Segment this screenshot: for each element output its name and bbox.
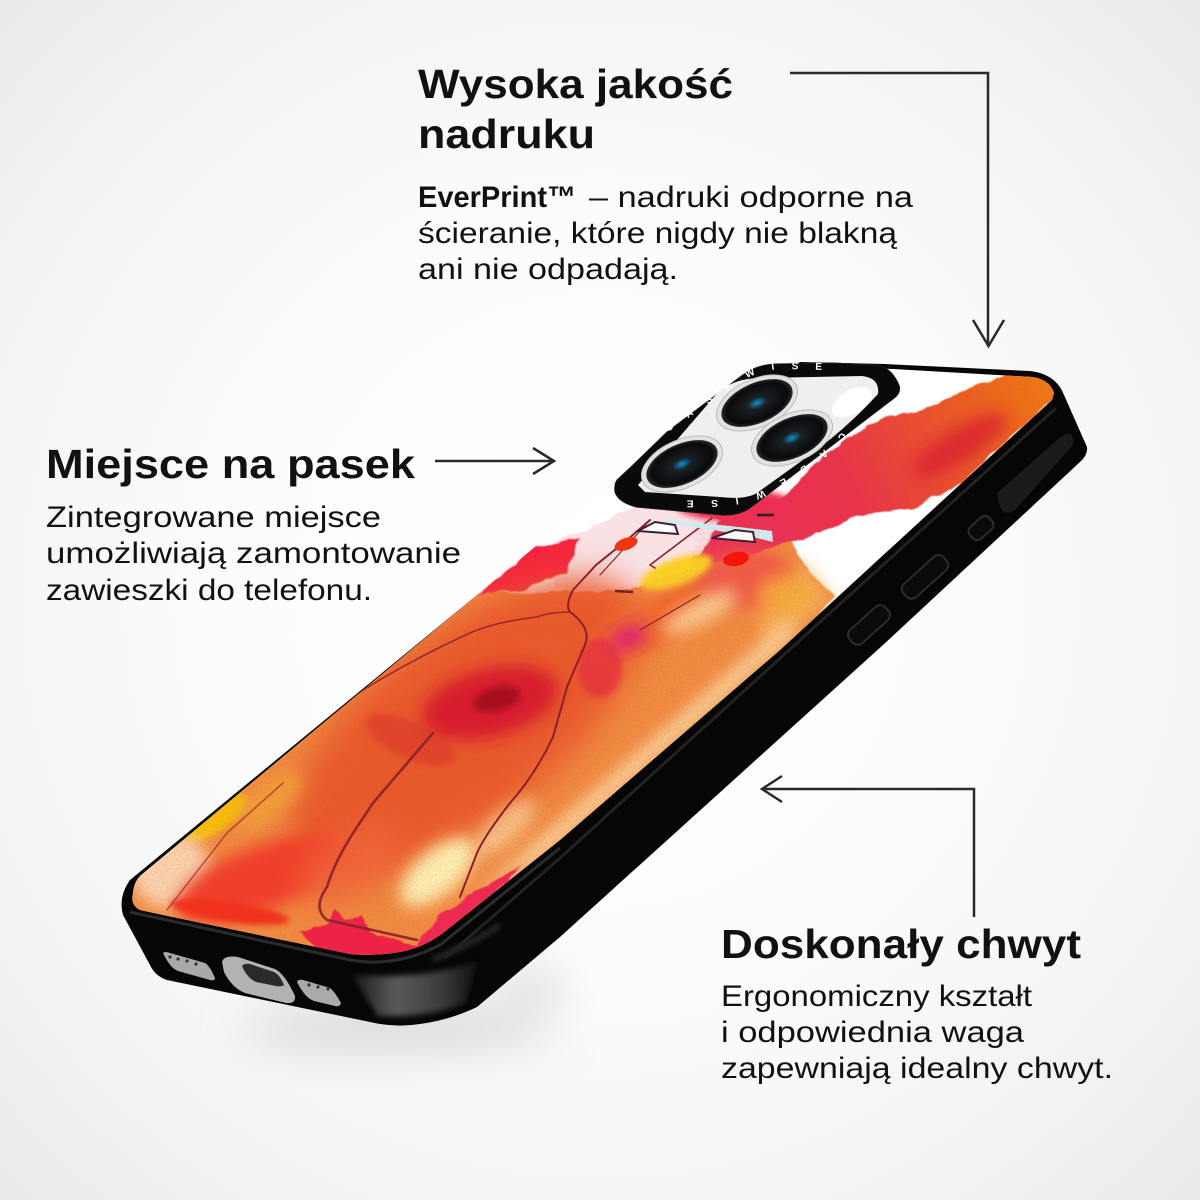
heading: print quality: nadruku [418,111,595,157]
text: perfect grip description: zapewniają idealny chwyt. [721,1052,1113,1085]
bump engraved brand text [668,362,846,508]
callout: perfect grip [721,776,1113,1085]
text: perfect grip description: Ergonomiczny kształt [721,980,1033,1013]
arrow: to strap slot [435,448,554,474]
callout: strap slot [46,441,554,607]
camera lens right [743,399,841,477]
text: perfect grip description [721,980,1113,1085]
camera window [638,376,878,498]
text: print quality description [418,181,913,286]
artwork drawn lines [167,518,712,940]
bump engraved brand text: CASEWISE [687,434,846,508]
arrow: to phone top corner [790,73,1004,346]
side buttons [845,513,996,648]
heading: print quality: Wysoka jakość [418,61,733,107]
callout: print quality [418,61,1004,346]
heading: perfect grip: Doskonały chwyt [721,921,1081,967]
text: print quality description: EverPrint™ [418,181,576,214]
arrow: to phone side [762,776,974,917]
text: print quality description: ani nie odpadają. [418,253,678,286]
screen artwork [132,368,1054,955]
artwork eyes and cheeks [613,515,774,592]
camera lens left [633,425,731,503]
text: strap slot description: Zintegrowane miejsce [46,501,381,534]
camera lens top [708,364,806,442]
heading: print quality [418,61,733,157]
bump engraved brand text: CASEWISE [668,362,822,431]
phone in black case [122,362,1088,1026]
text: strap slot description [46,501,461,607]
phone drop shadow [240,955,570,1048]
text: strap slot description: zawieszki do telefonu. [46,574,372,607]
bottom speakers and charging port [163,952,341,1006]
heading: strap slot: Miejsce na pasek [46,441,415,487]
text: perfect grip description: i odpowiednia waga [721,1016,1024,1049]
case side highlights [130,408,1073,1016]
camera bump [614,362,900,516]
case body [122,362,1087,1026]
text: strap slot description: umożliwiają zamontowanie [46,537,461,570]
text: print quality description: ścieranie, które nigdy nie blakną [418,217,897,250]
text: print quality description: – nadruki odporne na [589,181,913,214]
